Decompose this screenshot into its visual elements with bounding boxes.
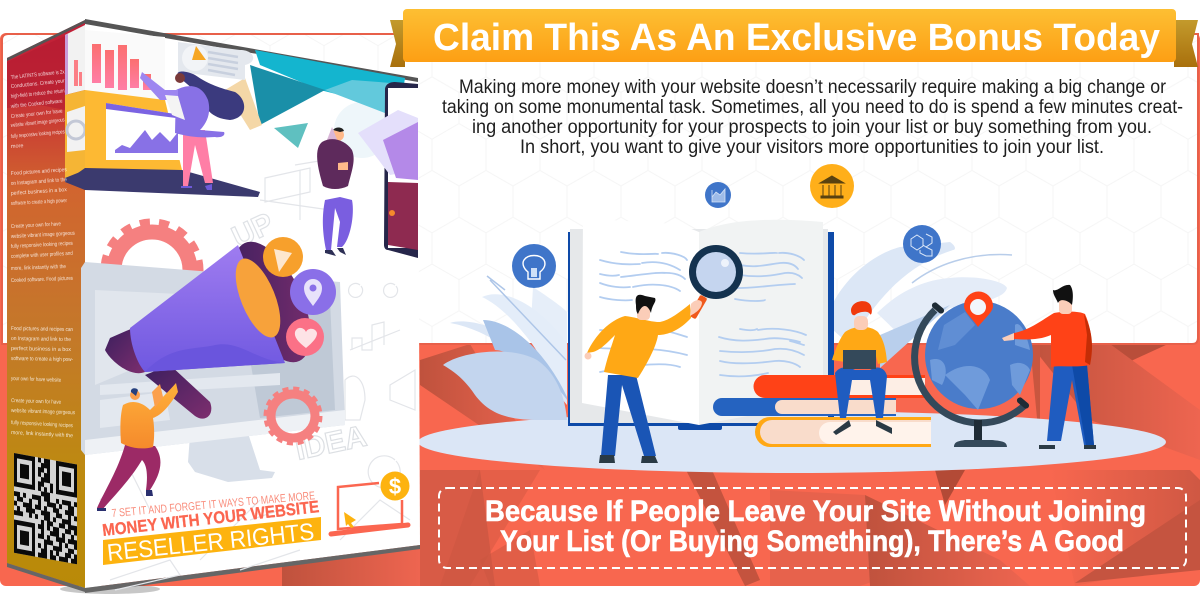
- monitor: [81, 262, 345, 482]
- laptop dollar icon: [331, 472, 410, 534]
- icon: pin: [290, 269, 336, 315]
- box top edge: [85, 19, 418, 82]
- box side face: your own for have website: [11, 376, 61, 384]
- box side face: Food pictures and recipes can: [11, 326, 73, 333]
- box side face: perfect business in a box: [11, 187, 67, 197]
- box side face: Create your own for have: [11, 109, 63, 120]
- box side face: more: [11, 143, 24, 150]
- screen with bar chart: [85, 30, 165, 100]
- box side face: Conductions. Create your: [11, 78, 65, 90]
- box side face: website vibrant image gorgeous: [10, 408, 75, 416]
- megaphone: [105, 230, 327, 419]
- box side face: on Instagram and link to the: [11, 177, 67, 187]
- callout: [439, 488, 1186, 568]
- leaves right: [833, 242, 1012, 368]
- box side face: [7, 20, 85, 592]
- heading: Claim This As An Exclusive Bonus Today: [433, 17, 1160, 59]
- books stack: [713, 375, 931, 447]
- gear top: [105, 223, 199, 317]
- woman with tablet: [140, 72, 244, 190]
- product box: [7, 19, 420, 594]
- doodles: UP: [227, 207, 279, 254]
- doodles: IDEA: [293, 420, 370, 467]
- person sitting on books: [832, 301, 892, 435]
- callout: Your List (Or Buying Something), There’s A Good: [500, 525, 1124, 558]
- box side face: on Instagram and link to the: [11, 336, 71, 343]
- box side face: complete with user profiles and: [11, 251, 73, 260]
- map pin: [964, 292, 993, 327]
- box side face: The LATINTS software is 2x: [11, 69, 65, 81]
- laptop: [68, 90, 260, 197]
- gear lower: [266, 389, 320, 443]
- leaves left: [443, 276, 567, 420]
- icon: heart: [286, 318, 324, 356]
- box title: MONEY WITH YOUR WEBSITE: [101, 497, 320, 540]
- man with magnifier: [584, 295, 702, 463]
- box subtitle: 7 SET IT AND FORGET IT WAYS TO MAKE MORE: [111, 490, 316, 520]
- phone and wallet: [358, 82, 418, 258]
- callout: Because If People Leave Your Site Without Joining: [485, 495, 1146, 528]
- box side face: software to create a high power: [11, 198, 67, 207]
- intro text block: [442, 77, 1183, 158]
- reseller rights badge: RESELLER RIGHTS: [106, 518, 315, 567]
- box side face: Cooked software. Food pictures: [11, 276, 73, 284]
- box side face: Create your own for have: [11, 398, 61, 406]
- box side face: Food pictures and recipes: [11, 167, 67, 177]
- doodles: [100, 102, 415, 590]
- illustration: research scene: [443, 164, 1096, 463]
- icon: hexagons: [903, 225, 941, 263]
- book text lines: [600, 252, 806, 376]
- box side face: high-field to reduce the return: [11, 88, 65, 100]
- icon: bank: [810, 164, 854, 208]
- magnifier: [689, 245, 743, 319]
- white panel: [2, 34, 1198, 344]
- person pointing at globe: [1002, 285, 1096, 449]
- box bottom edge: [85, 545, 420, 593]
- icon: light bulb: [512, 244, 556, 288]
- QR code: [14, 453, 77, 564]
- box side face: perfect business in a box: [11, 346, 71, 353]
- intro text block: Making more money with your website doesn’t necessarily require making a big change or: [459, 77, 1167, 98]
- box side face: software to create a high pow-: [11, 356, 73, 363]
- icon: play: [263, 237, 303, 277]
- box side face: website vibrant image gorgeous: [10, 231, 75, 240]
- box side face: Create your own for have: [11, 221, 61, 230]
- box side face: more, link instantly with the: [11, 430, 73, 439]
- man with phone: [317, 127, 354, 256]
- box front face: [85, 20, 420, 588]
- intro text block: In short, you want to give your visitors more opportunities to join your list.: [520, 137, 1104, 158]
- box side face: fully responsive looking recipes: [11, 241, 73, 250]
- ground ellipse: [418, 411, 1166, 473]
- box side face: with the Cooked software: [10, 99, 63, 110]
- laptop dollar icon: $: [389, 474, 401, 499]
- pie card: [178, 42, 253, 80]
- box side face: fully responsive looking recipes: [11, 420, 73, 429]
- box side face: website vibrant image gorgeous: [10, 117, 65, 129]
- header ribbon: [390, 9, 1198, 67]
- globe: [915, 301, 1033, 447]
- icon: chart: [705, 182, 731, 208]
- open book: [568, 213, 834, 430]
- teal shapes: [225, 50, 418, 148]
- box shadow: [60, 584, 160, 594]
- box side face: more, link instantly with the: [11, 264, 66, 272]
- intro text block: ing another opportunity for your prospects to join your list or buy something from you.: [472, 117, 1152, 138]
- box side face: fully responsive looking recipes: [11, 129, 65, 140]
- man pushing megaphone: [97, 383, 178, 511]
